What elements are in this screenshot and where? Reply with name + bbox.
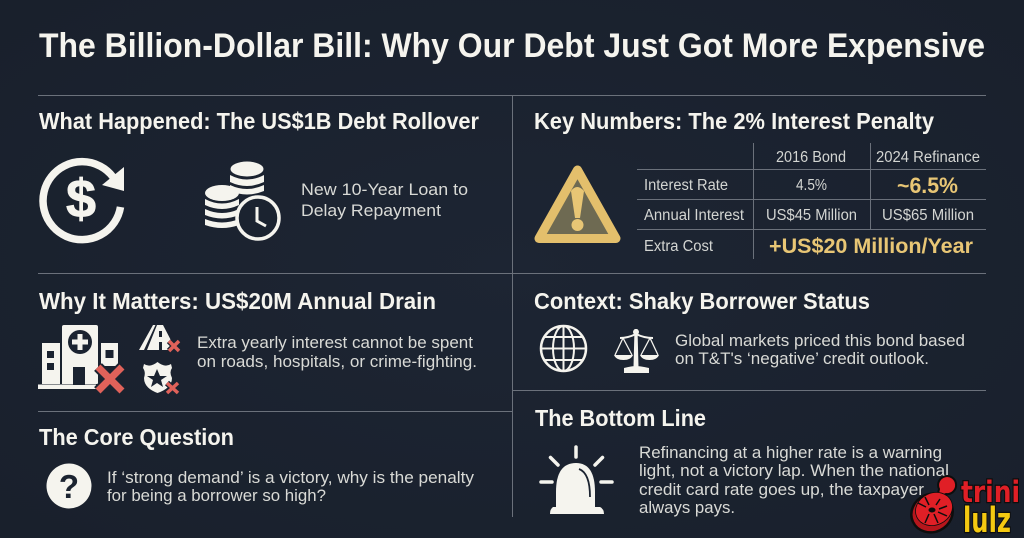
comparison table: 2016 Bond xyxy=(776,149,846,166)
comparison table: ~6.5% xyxy=(897,173,958,198)
icon: question mark xyxy=(46,464,92,508)
comparison table: US$65 Million xyxy=(882,207,974,224)
text: why it matters: on roads, hospitals, or crime-fighting. xyxy=(197,352,477,371)
comparison table: +US$20 Million/Year xyxy=(769,234,974,258)
icon: coins and clock xyxy=(205,162,279,239)
panel: core question xyxy=(39,424,475,508)
comparison table: Extra Cost xyxy=(644,238,714,255)
comparison table xyxy=(637,143,986,259)
heading: why it matters: Why It Matters: US$20M Annual Drain xyxy=(39,288,436,314)
icon: globe xyxy=(541,326,586,371)
title: The Billion-Dollar Bill: Why Our Debt Just Got More Expensive xyxy=(39,27,985,65)
icon: balance scale xyxy=(614,329,659,373)
icon: question mark: ? xyxy=(59,468,79,505)
comparison table: Annual Interest xyxy=(644,207,745,224)
panel: context xyxy=(534,288,965,373)
comparison table: Interest Rate xyxy=(644,177,728,194)
icon: warning triangle xyxy=(539,170,616,238)
panel: why it matters xyxy=(38,288,477,393)
panel: key numbers xyxy=(534,108,986,259)
text: context: on T&T's ‘negative’ credit outlook. xyxy=(675,349,929,368)
icon: dollar rollover xyxy=(43,162,124,240)
text: why it matters: Extra yearly interest cannot be spent xyxy=(197,333,473,352)
icon: police shield crossed out xyxy=(143,362,178,393)
heading: core question: The Core Question xyxy=(39,424,234,450)
panel: bottom line xyxy=(535,405,949,517)
text: bottom line: credit card rate goes up, the taxpayer xyxy=(639,480,924,499)
icon: siren xyxy=(541,447,612,514)
icon: hospital crossed out xyxy=(38,325,122,391)
comparison table: US$45 Million xyxy=(766,207,857,224)
heading: bottom line: The Bottom Line xyxy=(535,405,706,431)
text: bottom line: always pays. xyxy=(639,498,735,517)
text: new loan: New 10-Year Loan to xyxy=(301,180,468,199)
icon: road crossed out xyxy=(139,325,179,351)
text: new loan: Delay Repayment xyxy=(301,201,441,220)
text: core question: If ‘strong demand’ is a victory, why is the penalty xyxy=(107,468,475,487)
heading: context: Context: Shaky Borrower Status xyxy=(534,288,870,314)
comparison table: 4.5% xyxy=(796,177,827,194)
logo: trini lulz xyxy=(905,475,1020,538)
panel: what happened xyxy=(39,108,479,240)
heading: key numbers: Key Numbers: The 2% Interest Penalty xyxy=(534,108,934,134)
text: context: Global markets priced this bond based xyxy=(675,331,965,350)
text: bottom line: Refinancing at a higher rate is a warning xyxy=(639,443,942,462)
comparison table: 2024 Refinance xyxy=(876,149,980,166)
heading: what happened: What Happened: The US$1B Debt Rollover xyxy=(39,108,479,134)
icon: dollar rollover: $ xyxy=(66,169,96,229)
text: bottom line: light, not a victory lap. When the national xyxy=(639,461,949,480)
text: core question: for being a borrower so high? xyxy=(107,486,326,505)
